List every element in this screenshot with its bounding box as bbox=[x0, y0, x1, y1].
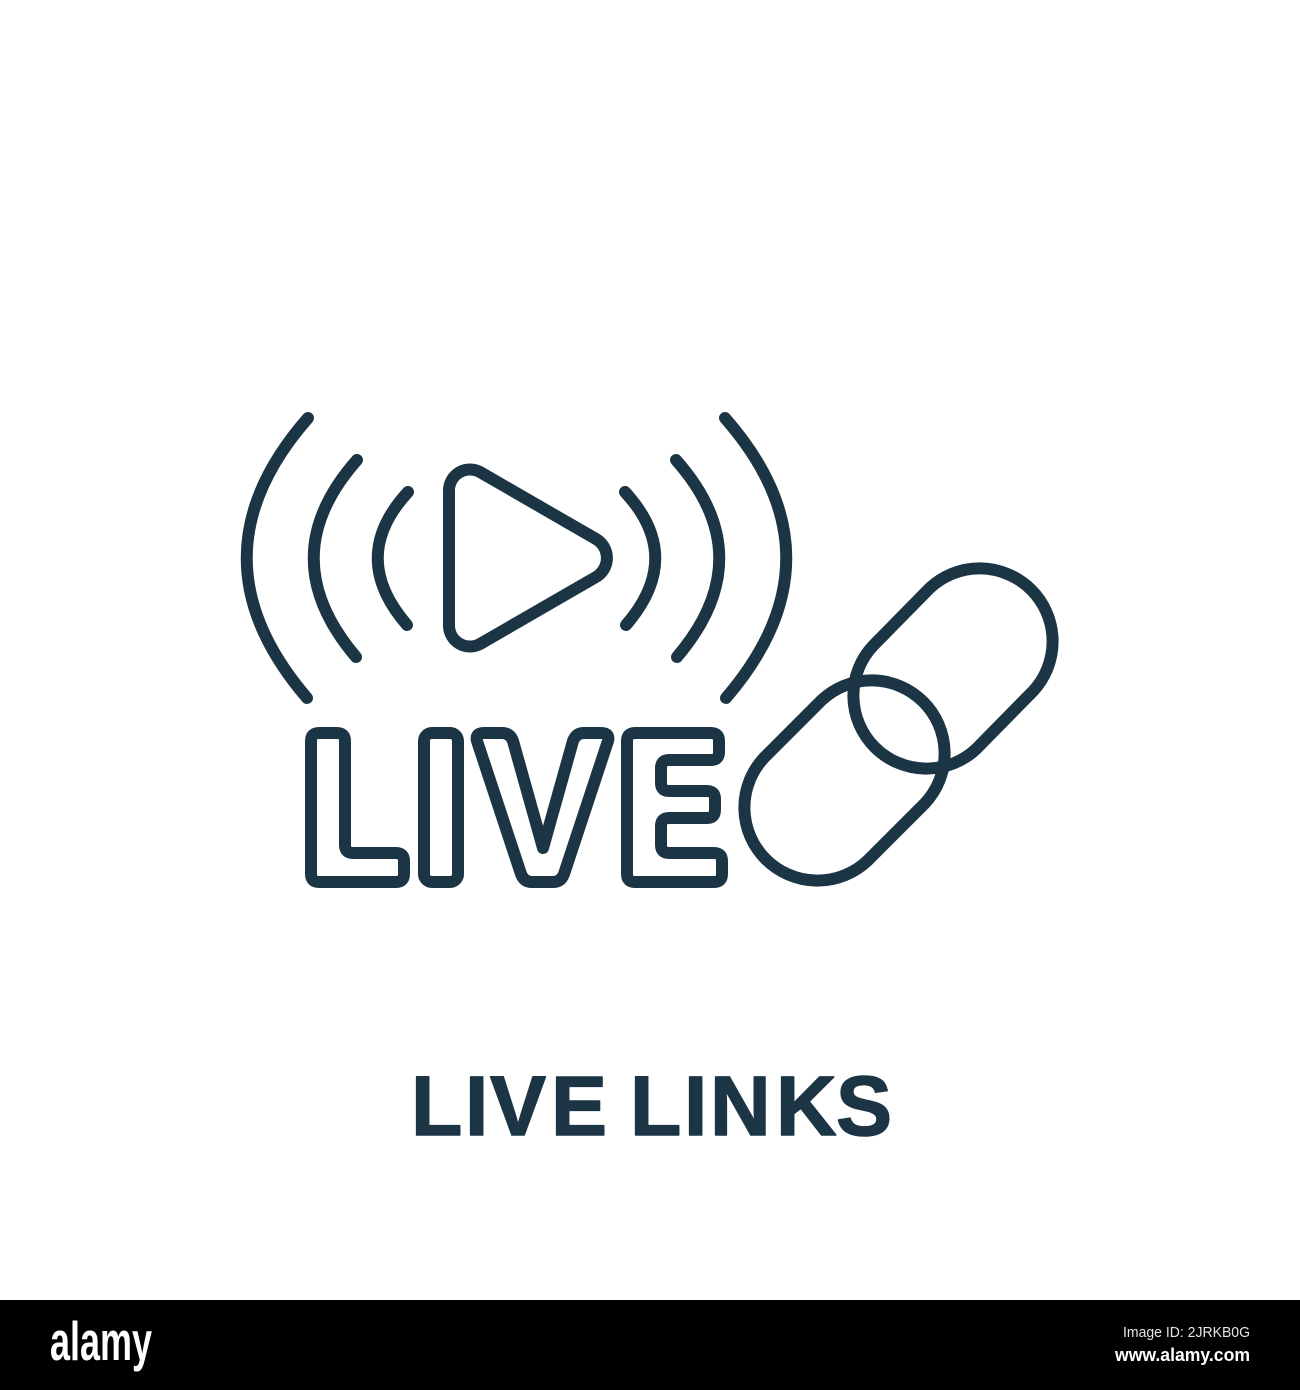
footer website: www.alamy.com bbox=[1114, 1345, 1250, 1365]
icon: live links bbox=[247, 418, 1053, 882]
icon: right broadcast waves bbox=[625, 418, 786, 698]
icon: chain link bbox=[744, 568, 1053, 881]
footer logo: alamy: alamy bbox=[50, 1310, 152, 1372]
footer bar bbox=[0, 1300, 1300, 1390]
icon: left broadcast waves bbox=[247, 418, 408, 698]
icon: play triangle bbox=[449, 469, 607, 647]
outlined word: LIVE bbox=[311, 733, 722, 882]
title: LIVE LINKS: LIVE LINKS bbox=[411, 1059, 892, 1153]
footer image id: Image ID: 2JRKB0G bbox=[1123, 1324, 1250, 1341]
